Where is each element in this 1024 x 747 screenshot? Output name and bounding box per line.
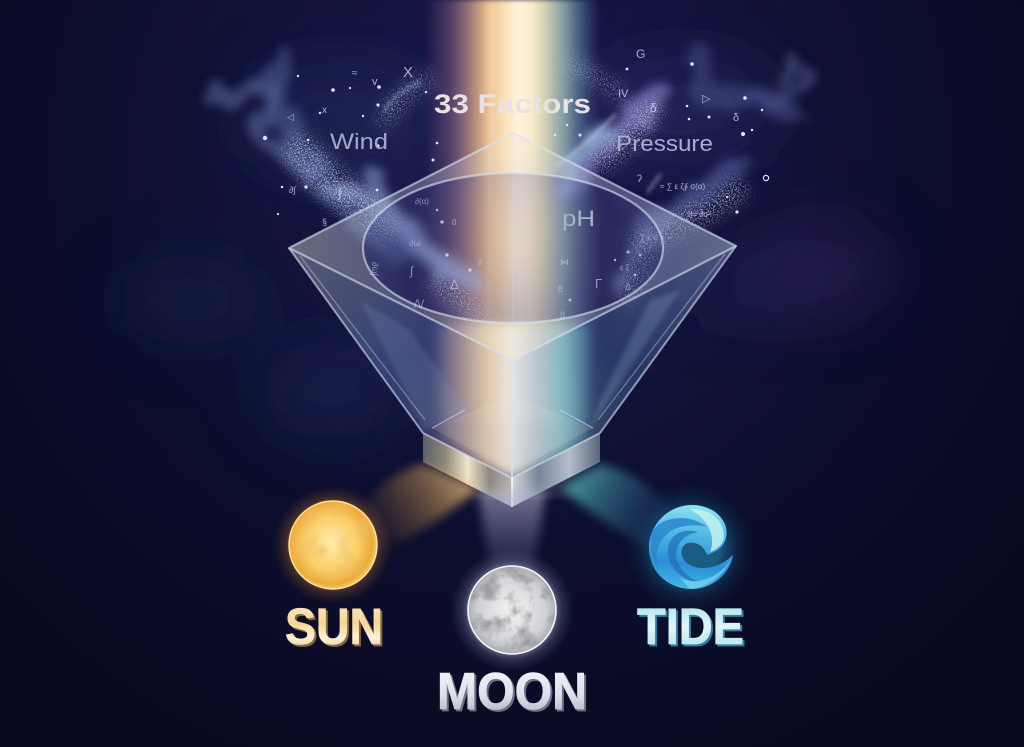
dust particles (300, 65, 735, 335)
funnel rim (289, 133, 736, 360)
math glyphs: ≈ ∑ ε ζ∮ σ(α) (660, 182, 705, 191)
soft beam halo (400, 0, 625, 420)
math glyphs: ⋈ (560, 257, 569, 267)
funnel (289, 133, 736, 507)
math glyphs: ∫ (409, 264, 414, 278)
math glyphs: 8 (558, 284, 563, 294)
math glyphs: ▷ (702, 93, 711, 105)
label: TIDE: TIDE (637, 598, 744, 655)
light trail to moon (478, 490, 546, 575)
math glyphs: § (322, 217, 327, 227)
nebula clouds (115, 55, 890, 440)
light beam (425, 0, 600, 500)
label: SUN: SUN (285, 598, 383, 655)
math glyphs: ◁ (287, 112, 294, 122)
math glyphs: ε ξ (620, 263, 630, 272)
tide icon (624, 482, 756, 614)
inner base (432, 395, 593, 472)
light trail to sun (362, 464, 478, 552)
math glyphs: ∂ω∫ (370, 262, 380, 277)
math glyphs: Δ (625, 282, 631, 292)
math glyphs: II= ∂σ² (688, 210, 711, 219)
label: SUN: SUN (287, 600, 385, 657)
label: pH: pH (562, 206, 595, 231)
math glyphs: IV (618, 88, 629, 100)
math glyphs: ∂ (520, 269, 524, 278)
math glyphs: /\/ (414, 297, 425, 311)
collar left (423, 433, 512, 507)
label: MOON: MOON (437, 663, 587, 721)
math glyphs: ∑ ε ∂ ≈ ∼ (640, 233, 673, 242)
smoke wisps (216, 50, 806, 285)
dots (263, 62, 769, 301)
math glyphs (287, 47, 739, 320)
funnel well (363, 173, 663, 323)
moon icon (454, 552, 570, 668)
math glyphs: G (636, 47, 645, 61)
funnel left face (289, 248, 513, 478)
collar right (512, 433, 600, 507)
math glyphs: δ (733, 112, 739, 124)
internal refractions (440, 325, 590, 478)
light trail to tide (562, 464, 672, 552)
math glyphs: δ (650, 101, 657, 115)
math glyphs: v (372, 76, 378, 88)
math glyphs: ∂ (478, 258, 482, 267)
math glyphs: ∂ω (409, 238, 420, 248)
math glyphs: ʔ (637, 174, 642, 185)
label: TIDE: TIDE (639, 600, 746, 657)
label: Pressure: Pressure (616, 131, 713, 156)
glass edges (289, 133, 736, 507)
math glyphs: Δ (450, 277, 459, 292)
math glyphs: X (403, 64, 413, 81)
math glyphs: 0 (452, 218, 457, 227)
math glyphs: x (322, 105, 327, 116)
label: MOON: MOON (439, 665, 589, 723)
math glyphs: ∂∫ (289, 185, 297, 195)
math glyphs: ∫ (337, 185, 343, 200)
math glyphs: ≈ (352, 68, 358, 79)
funnel right face (512, 246, 736, 478)
math glyphs: β (560, 310, 565, 320)
math glyphs: ∂(α) (415, 197, 429, 206)
title: 33 Factors: 33 Factors (434, 89, 591, 119)
label: Wind: Wind (330, 129, 388, 154)
sun icon (273, 485, 393, 605)
math glyphs: Γ (595, 276, 602, 291)
